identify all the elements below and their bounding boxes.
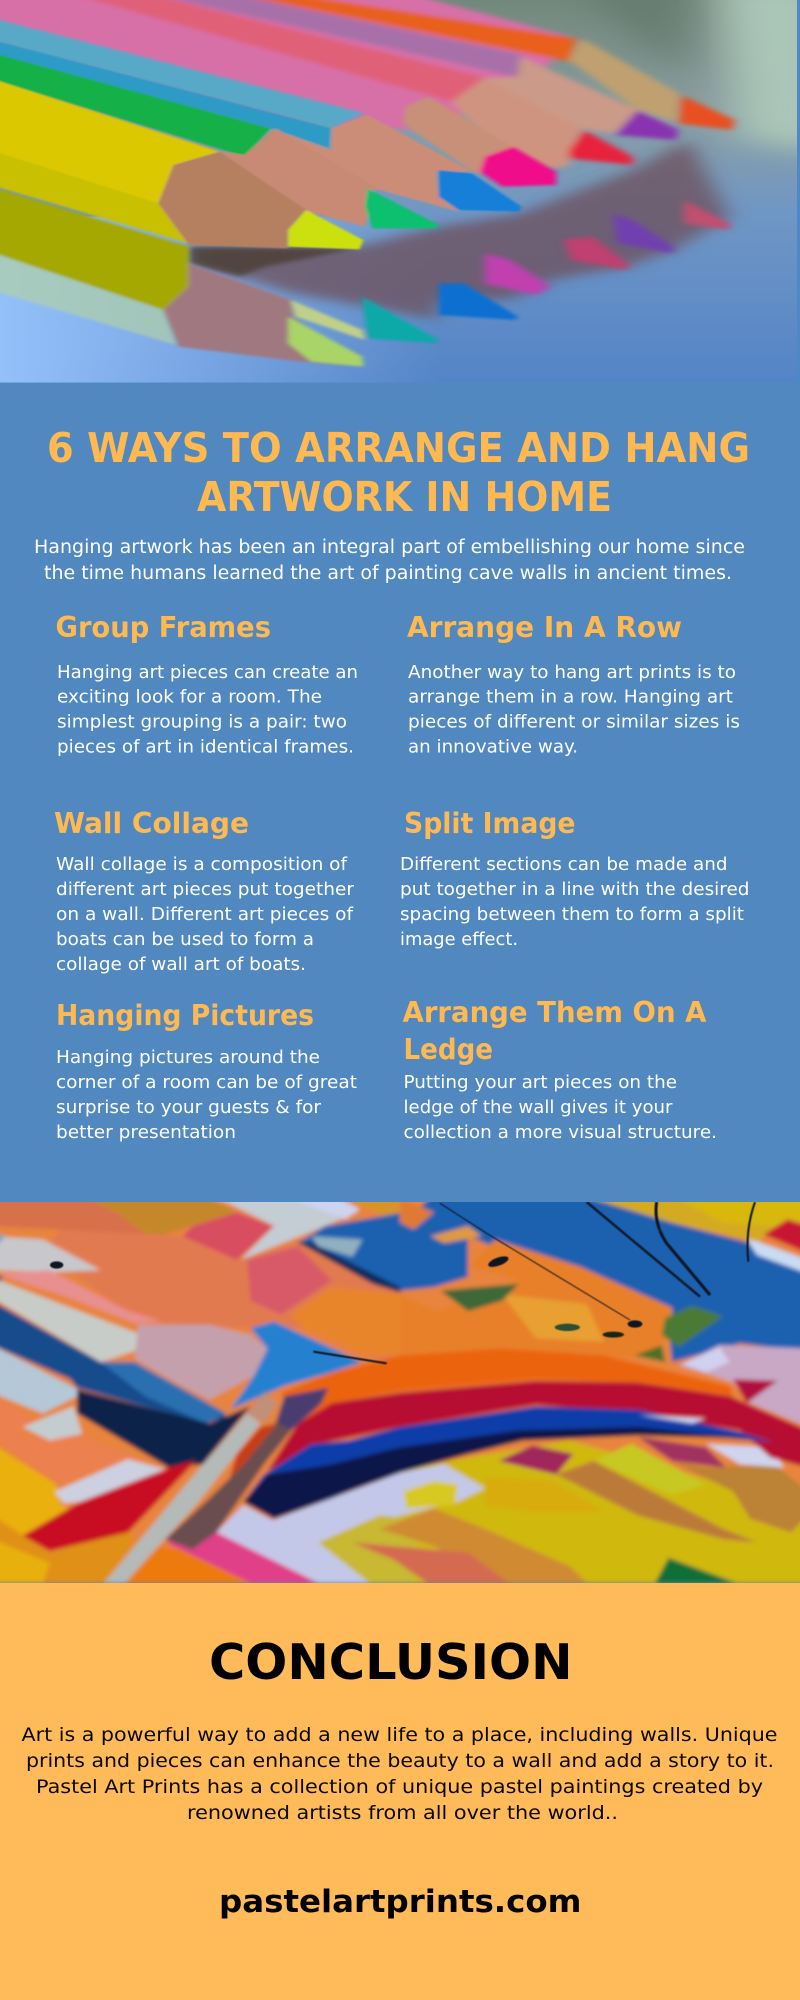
intro text: the time humans learned the art of painting cave walls in ancient times. [44, 563, 732, 584]
item: arrange them on a ledge [402, 996, 717, 1143]
text: split image: Different sections can be made and [400, 854, 728, 875]
text: split image: spacing between them to form a split [400, 904, 744, 925]
text: arrange in a row: an innovative way. [408, 736, 578, 758]
title: 6 WAYS TO ARRANGE AND HANG [47, 424, 750, 472]
text: hanging pictures [56, 1047, 357, 1143]
reflections [194, 140, 730, 320]
text: split image: image effect. [400, 929, 518, 950]
item: wall collage [54, 807, 355, 975]
mirrored yellow pencil [0, 183, 518, 367]
text: split image: put together in a line with the desired [400, 879, 750, 900]
lower right yellow field [398, 1438, 800, 1583]
intro text: Hanging artwork has been an integral part of embellishing our home since [34, 537, 745, 558]
text: arrange in a row: Another way to hang art prints is to [408, 662, 736, 683]
text: arrange in a row [408, 662, 740, 758]
text: split image [400, 854, 750, 950]
text: group frames: exciting look for a room. The [57, 686, 322, 708]
heading: arrange them on a ledge [402, 996, 706, 1066]
text: wall collage: different art pieces put together [56, 879, 355, 900]
text: group frames: Hanging art pieces can create an [57, 662, 358, 683]
text: hanging pictures: better presentation [56, 1122, 236, 1143]
text: conclusion: prints and pieces can enhance the beauty to a wall and add a story to it. [26, 1750, 774, 1772]
text: arrange them on a ledge: ledge of the wall gives it your [404, 1097, 673, 1118]
heading: split image: Split Image [404, 807, 576, 840]
text: arrange them on a ledge: Putting your art pieces on the [404, 1072, 677, 1093]
text: arrange them on a ledge [404, 1072, 717, 1143]
item: split image [400, 807, 750, 950]
heading: wall collage: Wall Collage [54, 807, 249, 840]
item: group frames [56, 611, 358, 758]
text: group frames [57, 662, 358, 758]
heading: arrange them on a ledge: Ledge [404, 1033, 493, 1066]
photo: colored pencils [0, 0, 800, 383]
heading: group frames: Group Frames [56, 611, 271, 644]
text: group frames: simplest grouping is a pair: two [57, 712, 347, 732]
text: wall collage [56, 854, 355, 975]
text: conclusion [22, 1724, 778, 1824]
item: hanging pictures [56, 999, 357, 1143]
front pencils [0, 37, 521, 249]
title [47, 424, 750, 521]
brushes [230, 1423, 278, 1478]
panel: six ways [0, 383, 800, 1202]
text: arrange them on a ledge: collection a more visual structure. [404, 1122, 717, 1143]
heading: arrange them on a ledge: Arrange Them On A [402, 996, 706, 1029]
heading: hanging pictures: Hanging Pictures [56, 999, 314, 1032]
rainbow strokes [267, 1381, 800, 1471]
heading: conclusion: CONCLUSION [209, 1634, 572, 1691]
text: wall collage: boats can be used to form a [56, 929, 314, 950]
text: wall collage: collage of wall art of boats. [56, 954, 306, 975]
heading: arrange in a row: Arrange In A Row [407, 611, 682, 644]
upper right blue [400, 1194, 800, 1362]
website url: pastelartprints.com [219, 1884, 582, 1920]
title: ARTWORK IN HOME [197, 473, 612, 521]
text: arrange in a row: arrange them in a row. Hanging art [408, 686, 733, 708]
text: wall collage: Wall collage is a composition of [56, 854, 348, 875]
text: hanging pictures: Hanging pictures around the [56, 1047, 320, 1068]
text: conclusion: renowned artists from all over the world.. [187, 1802, 618, 1824]
text: hanging pictures: corner of a room can be of great [56, 1072, 357, 1093]
text: hanging pictures: surprise to your guests & for [56, 1097, 322, 1118]
item: arrange in a row [407, 611, 740, 758]
text: conclusion: Pastel Art Prints has a collection of unique pastel paintings created by [36, 1776, 763, 1798]
text: wall collage: on a wall. Different art pieces of [56, 904, 354, 925]
text: conclusion: Art is a powerful way to add a new life to a place, including walls. Unique [22, 1724, 778, 1746]
panel: conclusion [0, 1583, 800, 2000]
photo: abstract painting with brushes [0, 1194, 800, 1583]
intro text [34, 537, 745, 584]
text: group frames: pieces of art in identical frames. [57, 736, 354, 758]
paint drips and lines [50, 1202, 755, 1363]
text: arrange in a row: pieces of different or similar sizes is [408, 712, 740, 732]
